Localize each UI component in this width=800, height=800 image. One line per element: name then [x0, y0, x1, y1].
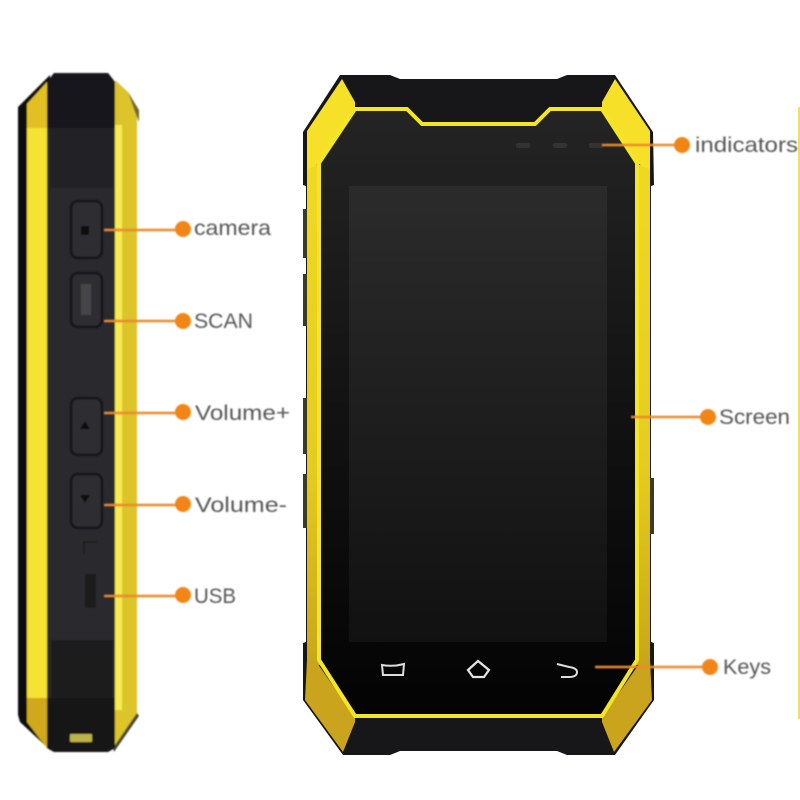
callout: Keys — [595, 656, 771, 679]
side phone body — [47, 73, 115, 752]
button: SCAN — [71, 273, 102, 327]
button: Volume down — [71, 474, 102, 528]
callout: Keys: Keys — [723, 656, 771, 679]
button: Volume up — [71, 398, 102, 455]
callout: camera: camera — [194, 217, 271, 240]
callout: SCAN: SCAN — [194, 310, 253, 333]
callout: indicators — [602, 134, 798, 157]
callout: camera — [104, 217, 271, 240]
callout: SCAN — [104, 310, 253, 333]
top-right yellow corner — [602, 79, 650, 170]
yellow side rails — [307, 165, 321, 665]
callout: USB: USB — [194, 585, 236, 608]
callout: Screen: Screen — [719, 406, 790, 429]
side view of phone — [18, 73, 139, 752]
indicator lights — [516, 143, 603, 148]
callout: Volume+ — [104, 402, 290, 425]
icon: back key — [557, 664, 577, 677]
callout: USB — [104, 585, 236, 608]
front phone outer shell — [303, 75, 654, 755]
neighbouring phone edge — [798, 107, 800, 719]
callout: indicators: indicators — [695, 134, 798, 157]
USB port label — [85, 574, 96, 608]
side phone left yellow band — [27, 82, 47, 748]
side phone left black edge — [18, 75, 50, 750]
top-left yellow corner — [307, 79, 355, 170]
bottom connector — [70, 734, 92, 742]
icon: menu key — [382, 664, 404, 675]
callout: Volume+: Volume+ — [195, 402, 290, 425]
icon: home key — [468, 661, 489, 677]
button: camera — [71, 201, 102, 258]
microphone slot — [84, 542, 97, 554]
callout: Volume- — [104, 494, 287, 517]
side phone right yellow band — [114, 80, 137, 750]
bottom-left yellow corner — [305, 660, 355, 752]
callout: Screen — [631, 406, 790, 429]
callouts — [104, 134, 798, 679]
side keys on front phone — [303, 209, 654, 534]
front glass face with yellow trim — [319, 109, 637, 716]
callout: Volume-: Volume- — [195, 494, 287, 517]
bottom-right yellow corner — [602, 660, 652, 752]
front view of phone — [303, 75, 654, 755]
screen — [349, 186, 607, 642]
